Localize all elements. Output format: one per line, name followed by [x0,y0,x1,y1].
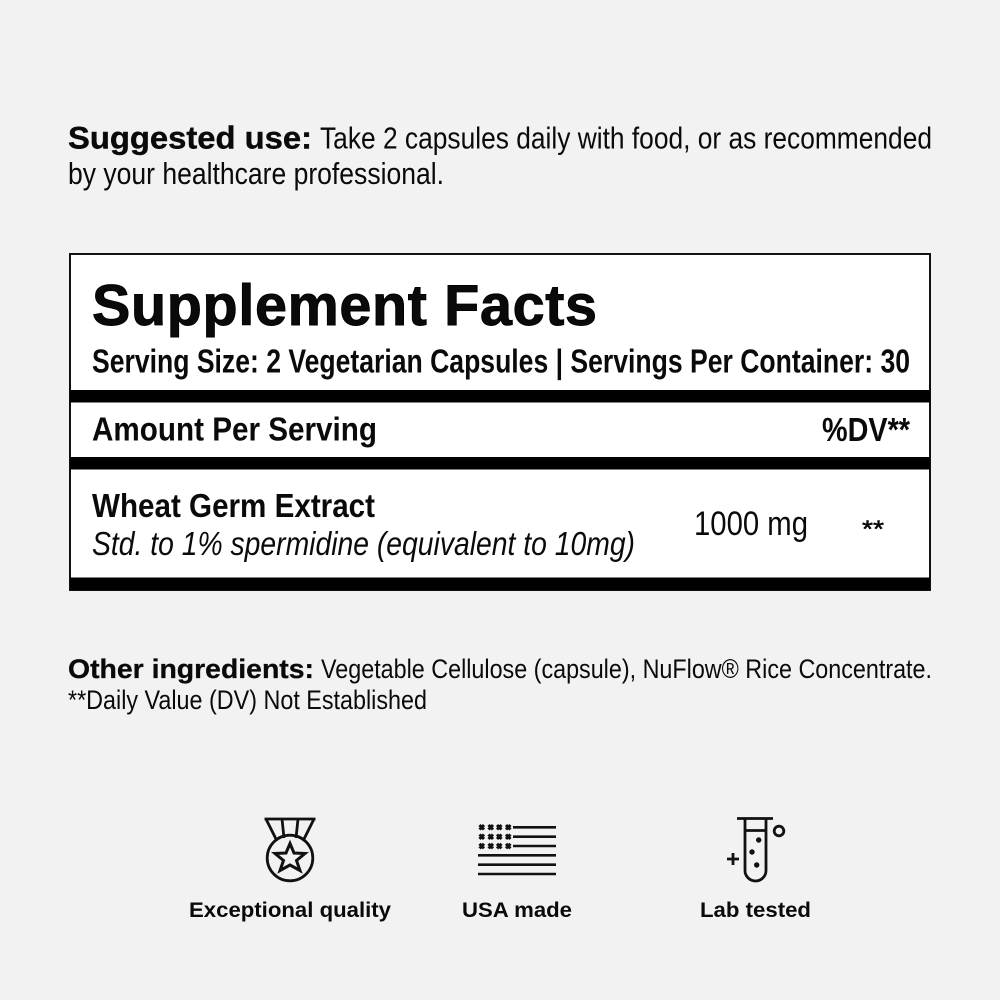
suggested use text: Suggested use: [68,120,312,156]
other ingredients text: **Daily Value (DV) Not Established [68,685,427,715]
label: exceptional quality: Exceptional quality [189,898,391,922]
divider bar [70,390,930,402]
bottom bar [70,578,930,590]
ingredient amount: 1000 mg [694,505,808,543]
icon: usa flag [478,825,556,874]
suggested use text [68,120,932,191]
other ingredients text: Other ingredients: [68,654,314,684]
divider bar [70,457,930,470]
ingredient name: Wheat Germ Extract [92,487,375,524]
icon: test tube [727,818,784,881]
ingredient standardisation: Std. to 1% spermidine (equivalent to 10mg) [92,525,635,562]
label: lab tested: Lab tested [700,898,811,922]
ingredient daily value: ** [862,516,884,543]
label: usa made: USA made [462,898,572,922]
panel: supplement facts [70,254,930,590]
other ingredients text [68,654,932,715]
suggested use text: by your healthcare professional. [68,156,444,191]
amount per serving header: Amount Per Serving [92,410,377,448]
heading: supplement facts: Supplement Facts [92,274,597,338]
other ingredients text: Vegetable Cellulose (capsule), NuFlow® Rice Concentrate. [321,654,932,684]
icon: medal [264,819,316,881]
daily value header: %DV** [822,411,910,448]
